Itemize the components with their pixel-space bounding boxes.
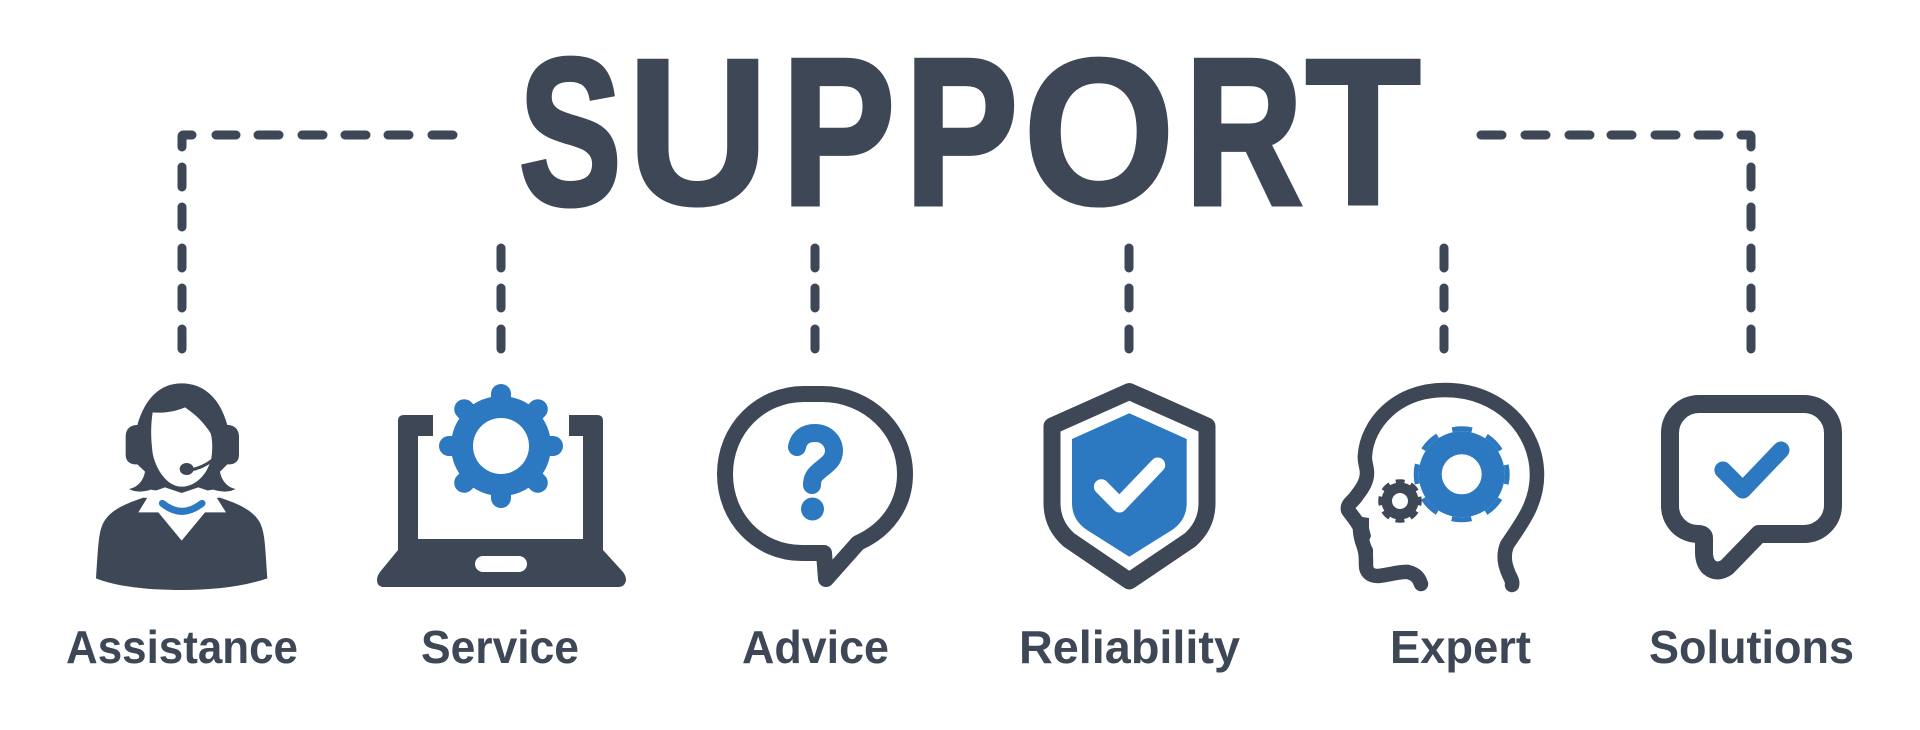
icon: laptop with gear bbox=[377, 394, 626, 587]
label: Advice: Advice bbox=[742, 621, 889, 673]
icon: check speech bubble bbox=[1670, 404, 1833, 570]
gear bbox=[449, 394, 553, 498]
title: P bbox=[905, 16, 1018, 249]
body bbox=[96, 498, 267, 590]
connector: dashed line to Reliability bbox=[1124, 248, 1134, 349]
connector: right dashed line to Solutions bbox=[1481, 135, 1751, 349]
lips bbox=[1356, 516, 1373, 560]
title: P bbox=[782, 16, 895, 249]
laptop body bbox=[377, 415, 626, 587]
connector: dashed line to Advice bbox=[810, 248, 820, 349]
title: R bbox=[1185, 16, 1303, 249]
title bbox=[519, 16, 1421, 249]
check mark bbox=[1101, 465, 1158, 505]
title: U bbox=[627, 16, 769, 249]
touchpad bbox=[475, 556, 527, 572]
label: Service: Service bbox=[421, 621, 579, 673]
small gear bbox=[1380, 481, 1420, 521]
label: Expert: Expert bbox=[1390, 621, 1531, 673]
icon: headset agent bbox=[96, 383, 267, 590]
collar bbox=[138, 487, 226, 541]
hair and headset bbox=[126, 383, 239, 494]
face bbox=[151, 407, 212, 487]
icon: question speech bubble bbox=[725, 394, 905, 579]
hair sliver bbox=[195, 414, 210, 432]
smile bbox=[162, 503, 202, 511]
label: Solutions: Solutions bbox=[1649, 621, 1854, 673]
connector: dashed line to Service bbox=[496, 248, 506, 349]
icon: head with gears bbox=[1348, 390, 1537, 585]
mic bbox=[190, 460, 213, 470]
question mark bbox=[797, 433, 834, 485]
connector: dashed line to Expert bbox=[1440, 248, 1448, 349]
check mark bbox=[1723, 450, 1781, 490]
title: T bbox=[1304, 16, 1421, 249]
title: S bbox=[519, 16, 621, 249]
icon: shield with check bbox=[1052, 392, 1207, 581]
connector: left dashed line to Assistance bbox=[182, 135, 453, 349]
label: Assistance: Assistance bbox=[66, 621, 298, 673]
label: Reliability: Reliability bbox=[1019, 621, 1240, 673]
large gear bbox=[1416, 429, 1507, 520]
title: O bbox=[1023, 16, 1175, 249]
